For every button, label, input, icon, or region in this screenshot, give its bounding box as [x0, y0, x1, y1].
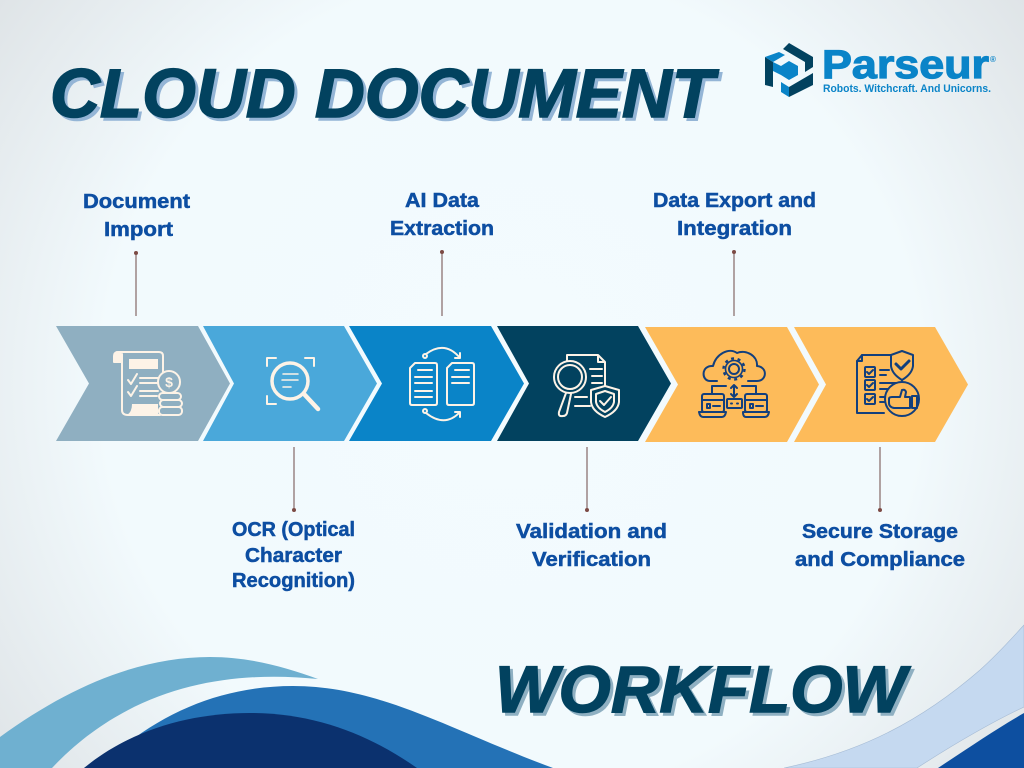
- label: validation and verification: Validation and: [516, 521, 667, 543]
- icon: invoice with coins: $: [165, 374, 173, 390]
- label: document import: Document: [83, 191, 190, 213]
- label: data export and integration: [653, 190, 816, 240]
- label: document import: Import: [104, 219, 173, 241]
- icon: cloud and devices: [699, 351, 769, 417]
- wordmark: Parseur: [822, 43, 989, 87]
- icon: ocr magnifier: [267, 358, 318, 409]
- connector: ai data extraction: [440, 250, 444, 316]
- connector: data export: [732, 250, 736, 316]
- wave: bottom left: [0, 657, 553, 768]
- label: validation and verification: [516, 521, 667, 571]
- connector: ocr: [292, 447, 296, 512]
- connector: document import: [134, 251, 138, 316]
- registered mark: ®: [990, 55, 996, 64]
- label: ai data extraction: AI Data: [405, 190, 480, 212]
- label: secure storage and compliance: Secure Storage: [802, 521, 958, 543]
- icon: parseur hexagon: [765, 43, 813, 97]
- label: ai data extraction: [390, 190, 494, 240]
- title: cloud document: CLOUD DOCUMENT: [50, 55, 719, 132]
- label: secure storage and compliance: [795, 521, 965, 571]
- icon: checklist shield and thumb: [857, 351, 919, 416]
- label: document import: [83, 191, 190, 241]
- logo: parseur: [765, 43, 996, 97]
- icon: search document and shield: [554, 355, 619, 417]
- label: ocr: OCR (Optical: [232, 519, 355, 541]
- label: ocr: [232, 519, 355, 592]
- connector: validation: [585, 447, 589, 512]
- label: secure storage and compliance: and Compliance: [795, 549, 965, 571]
- label: ocr: Recognition): [232, 570, 355, 592]
- tagline: Robots. Witchcraft. And Unicorns.: [823, 83, 991, 95]
- chevron 3: ai data extraction: [349, 326, 524, 441]
- icon: documents with arrows: [410, 348, 474, 420]
- title: cloud document: CLOUD DOCUMENT: [53, 58, 722, 135]
- chevron 1: document import: [56, 326, 230, 441]
- label: data export and integration: Integration: [677, 218, 792, 240]
- label: data export and integration: Data Export and: [653, 190, 816, 212]
- title: workflow: WORKFLOW: [495, 652, 911, 726]
- connector: secure storage: [878, 447, 882, 512]
- chevron 4: validation: [497, 326, 671, 441]
- chevron 2: ocr: [203, 326, 377, 441]
- chevron 5: data export: [645, 327, 819, 442]
- icon: invoice with coins: [114, 352, 182, 415]
- wave: bottom right: [784, 625, 1024, 768]
- chevron process: [56, 326, 968, 442]
- label: ocr: Character: [245, 545, 342, 567]
- title: workflow: WORKFLOW: [498, 655, 914, 729]
- chevron 6: secure storage: [794, 327, 968, 442]
- label: ai data extraction: Extraction: [390, 218, 494, 240]
- label: validation and verification: Verification: [532, 549, 651, 571]
